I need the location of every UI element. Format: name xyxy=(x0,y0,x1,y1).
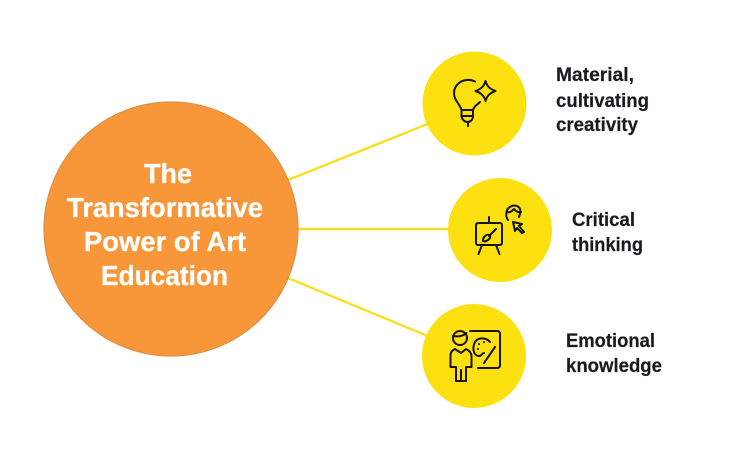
node: creativity xyxy=(422,52,526,156)
label: creativity: cultivating xyxy=(556,90,649,112)
label: emotional knowledge xyxy=(566,330,662,377)
title xyxy=(67,158,263,291)
icon: light bulb with sparkle xyxy=(454,80,496,126)
label: creativity xyxy=(556,64,649,136)
label: emotional knowledge: knowledge xyxy=(566,355,662,377)
connector: centre to critical thinking xyxy=(296,228,452,230)
title: Power of Art xyxy=(84,226,246,257)
icon: easel and figure with cursor xyxy=(476,206,524,254)
node: emotional knowledge xyxy=(422,304,526,408)
label: emotional knowledge: Emotional xyxy=(566,330,655,352)
label: creativity: creativity xyxy=(556,114,638,136)
connector: centre to creativity xyxy=(288,123,430,180)
title: Transformative xyxy=(67,192,263,223)
label: critical thinking: Critical xyxy=(572,209,635,231)
node: critical thinking xyxy=(448,178,552,282)
label: creativity: Material, xyxy=(556,64,634,86)
label: critical thinking: thinking xyxy=(572,234,643,256)
title: Education xyxy=(101,260,228,291)
central circle with title xyxy=(44,102,298,356)
title: The xyxy=(144,158,192,189)
connector: centre to emotional knowledge xyxy=(288,278,430,337)
label: critical thinking xyxy=(572,209,643,256)
icon: teacher with palette xyxy=(450,331,500,381)
